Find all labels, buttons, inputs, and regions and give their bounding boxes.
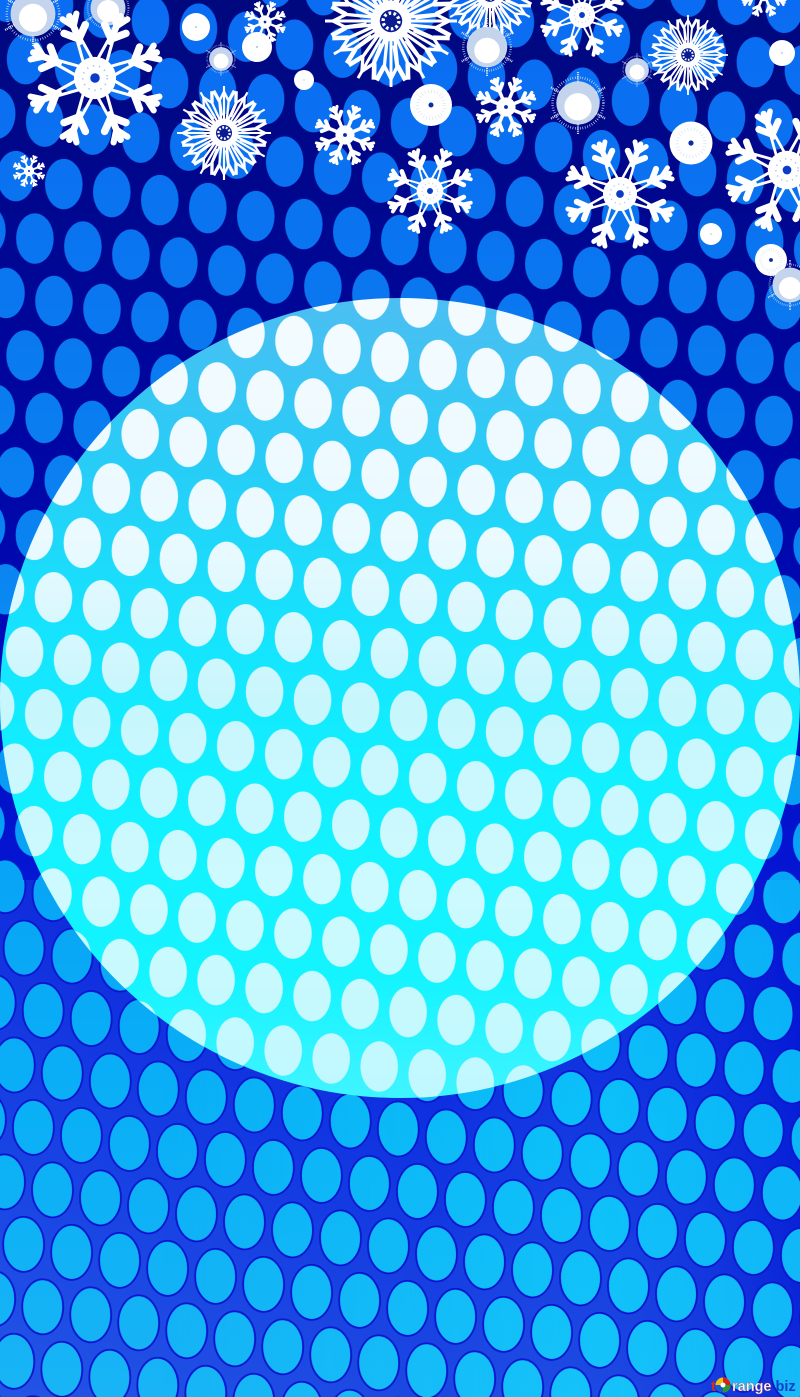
snowflakes cluster: [5, 0, 800, 310]
snowflake disc corner: [769, 40, 795, 66]
snowflake textured disc edge: [755, 244, 787, 276]
snowflake disc: [182, 13, 210, 41]
dot lattice lower: [0, 880, 800, 1397]
snowflake textured disc right: [670, 122, 712, 164]
snowflake pale center right: [551, 72, 605, 134]
snowflake branched corner: [742, 0, 786, 16]
snowflake textured disc: [410, 84, 452, 126]
snowflake pale right: [622, 53, 652, 87]
large translucent circle: [0, 298, 800, 1098]
logo ring: [716, 1378, 730, 1392]
snowflake pale: [206, 42, 236, 76]
snowflake branched: [316, 106, 374, 164]
snowflake large right: [567, 141, 673, 247]
lower dots cyan tint: [368, 880, 800, 1397]
snowflake small left: [13, 155, 45, 187]
snowflake branched top: [245, 2, 285, 42]
snowflake ornate right: [648, 15, 728, 95]
snowflake pale top: [86, 0, 130, 33]
watermark text: t: [711, 1379, 716, 1395]
snowflake disc small: [294, 70, 314, 90]
lower background side shading: [0, 880, 800, 1397]
dot outlines lower: [0, 880, 800, 1397]
snowflake ornate top center: [444, 0, 536, 40]
snowflake ornate left: [177, 86, 271, 180]
snowflake large left: [29, 12, 161, 144]
snowflake branched center: [388, 149, 472, 233]
snowflake disc right: [700, 223, 722, 245]
snowflake pale edge: [768, 260, 800, 310]
snowflake pale center: [462, 18, 512, 76]
snowflake large edge: [727, 110, 800, 230]
watermark logo: [711, 1378, 796, 1395]
watermark text: range: [732, 1379, 772, 1395]
dot lattice upper: [0, 0, 800, 880]
watermark text: .biz: [772, 1379, 796, 1395]
snowflake branched top right: [541, 0, 623, 56]
snowflake pale top left: [5, 0, 61, 46]
snowflake branched center right: [477, 78, 535, 136]
snowflake ornate top: [325, 0, 457, 87]
snowflake disc white: [242, 32, 272, 62]
